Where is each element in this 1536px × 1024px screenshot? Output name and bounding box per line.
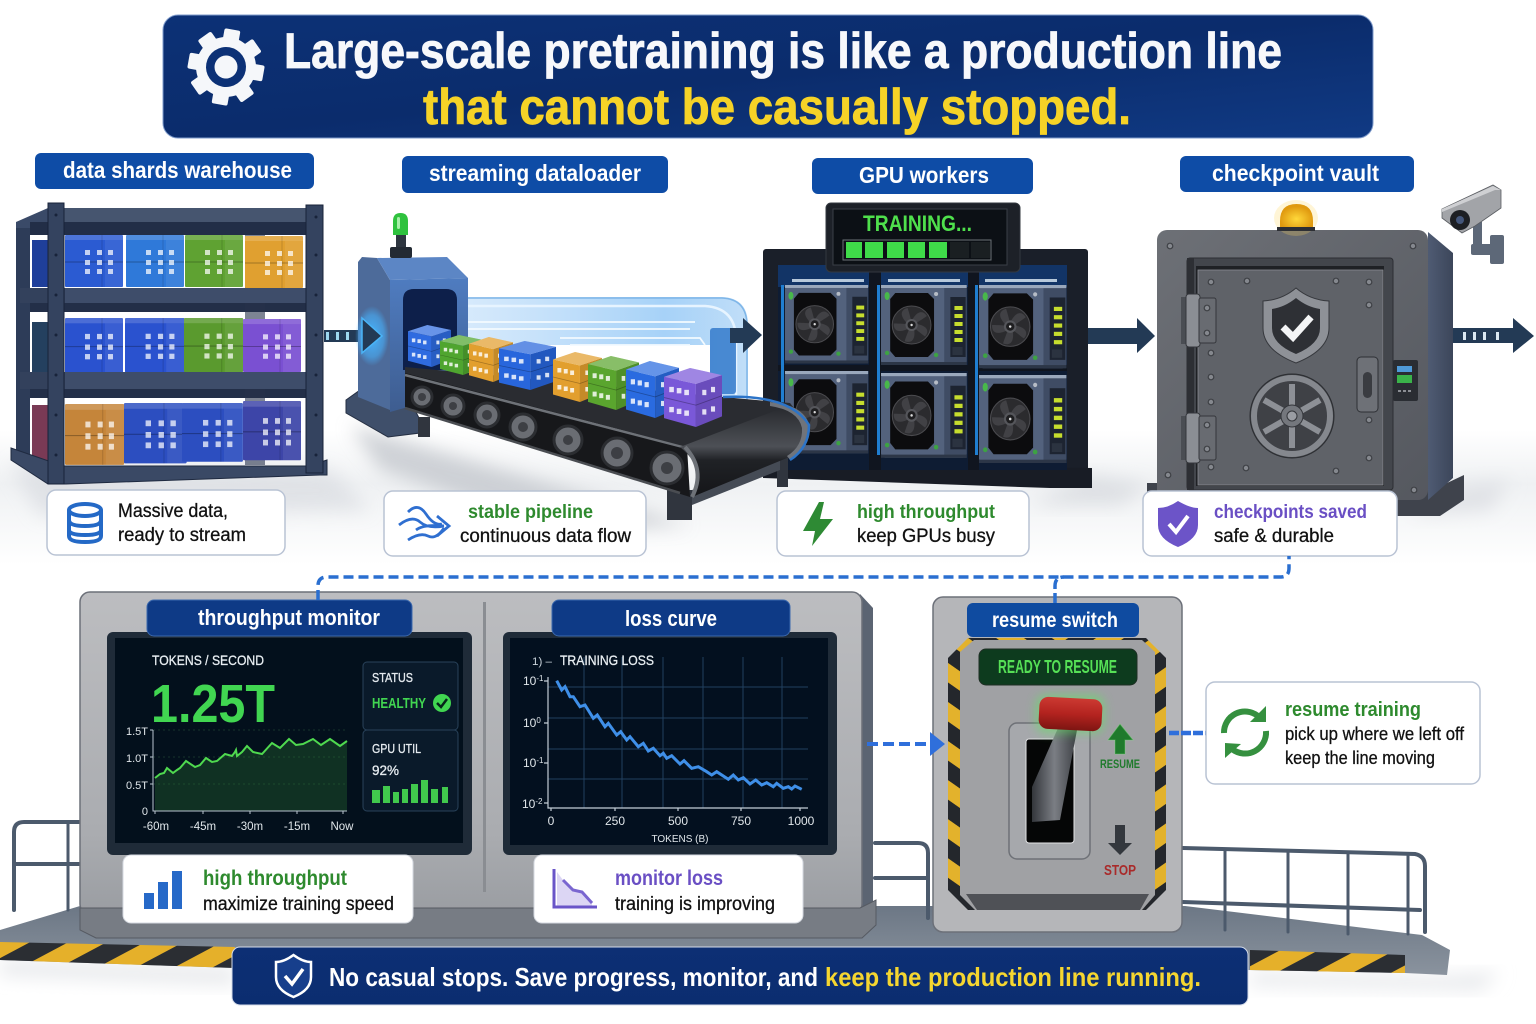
heading: data shards warehouse: data shards warehouse <box>63 157 292 183</box>
vault body <box>1157 230 1428 500</box>
lever glow <box>1036 695 1104 733</box>
chart: training loss: TOKENS (B) <box>651 834 709 845</box>
status panel: STATUS <box>372 670 413 685</box>
chart: throughput line: -45m <box>190 821 216 833</box>
training display <box>826 203 1020 272</box>
caption: keep GPUs busy <box>777 491 1029 556</box>
caption: high throughput: maximize training speed <box>203 894 394 915</box>
caption: high throughput: high throughput <box>203 867 347 890</box>
heading: streaming dataloader <box>402 156 668 193</box>
chart: throughput line: -60m <box>143 821 169 833</box>
caption: massive data: Massive data, <box>118 501 228 522</box>
chart: throughput line: -15m <box>284 821 310 833</box>
icon: vault shield with check <box>1263 288 1329 363</box>
chart: training loss: 10 <box>523 716 536 730</box>
chart: training loss: 500 <box>668 814 688 828</box>
icon: refresh arrows <box>1224 706 1266 758</box>
chart: training loss: 10 <box>523 756 536 770</box>
chart: training loss: 10 <box>523 674 536 688</box>
caption: checkpoints saved <box>1143 491 1397 556</box>
green status lamp <box>390 213 412 258</box>
caption: stable pipeline: continuous data flow <box>460 526 631 547</box>
arrow head into dataloader <box>362 318 382 353</box>
caption: monitor loss: monitor loss <box>615 867 723 890</box>
icon: purple shield <box>1158 501 1198 547</box>
dashed link to resume caption <box>1169 731 1206 735</box>
label: resume: RESUME <box>1100 759 1140 771</box>
vault handle <box>1357 357 1378 412</box>
lever red handle <box>1038 696 1103 732</box>
arrow: GPU rack to vault <box>1088 318 1155 353</box>
chart: throughput line: 1.5T <box>126 726 148 738</box>
panel: loss curve <box>503 600 837 923</box>
warehouse shelf with data shard boxes <box>11 203 327 484</box>
shelf uprights <box>48 203 323 484</box>
GPU units <box>785 285 1066 463</box>
chart: training loss: 1000 <box>788 814 815 828</box>
heading: resume switch: resume switch <box>992 609 1118 632</box>
heading: throughput monitor: throughput monitor <box>198 605 380 630</box>
arrow: vault output <box>1453 318 1534 353</box>
machine body <box>358 257 468 412</box>
icon: lightning bolt <box>803 502 833 546</box>
screen bezel <box>107 632 472 855</box>
caption: high throughput <box>123 855 413 923</box>
chart: throughput line: 0 <box>142 806 148 818</box>
checkpoint vault <box>1147 200 1464 516</box>
arrow: dataloader to GPU rack <box>730 318 762 353</box>
label: stop: STOP <box>1104 862 1136 879</box>
GPU utilisation panel <box>363 730 458 811</box>
metric: 1.25T: 1.25T <box>151 674 275 734</box>
switch housing <box>933 597 1182 932</box>
switch panel <box>960 640 1155 910</box>
conveyor belt top and end drum <box>405 367 810 497</box>
shelf row 2 boxes <box>65 318 301 373</box>
shelf planks <box>11 208 327 484</box>
status panel <box>363 662 458 730</box>
chart: training loss: -1 <box>536 674 544 683</box>
chart: training loss <box>522 652 815 845</box>
heading: GPU workers: GPU workers <box>859 162 989 188</box>
heading: checkpoint vault <box>1180 156 1414 192</box>
chart: training loss: 1) – <box>532 656 553 668</box>
screen bezel <box>503 632 837 855</box>
shelf row 1 boxes <box>65 235 303 288</box>
chart: training loss: 10 <box>522 797 535 811</box>
heading: streaming dataloader: streaming dataloader <box>429 160 641 186</box>
panel: resume switch <box>933 597 1182 932</box>
conveyor belt side and rollers <box>405 372 690 497</box>
heading: loss curve: loss curve <box>625 606 717 631</box>
banner text white: No casual stops. Save progress, monitor, and <box>329 962 818 992</box>
status display: READY TO RESUME <box>998 657 1117 677</box>
safety railings <box>14 822 1425 934</box>
caption: keep GPUs busy: high throughput <box>857 502 996 523</box>
heading: throughput monitor <box>147 600 412 636</box>
arrow: shelf to dataloader <box>324 330 362 342</box>
heading: checkpoint vault: checkpoint vault <box>1212 160 1379 186</box>
caption: resume training: resume training <box>1285 699 1421 721</box>
conveyor legs <box>418 417 788 520</box>
icon: gear <box>182 23 270 111</box>
chart: training loss: 0 <box>548 814 555 828</box>
chart: training loss: -2 <box>535 797 543 806</box>
caption: resume training: keep the line moving <box>1285 747 1435 768</box>
banner text yellow: keep the production line running. <box>825 962 1201 992</box>
icon: loss chart <box>554 869 597 907</box>
chart: throughput line: 1.0T <box>126 753 148 765</box>
vault keypad <box>1393 360 1418 401</box>
chart: training loss: 750 <box>731 814 751 828</box>
heading: loss curve <box>552 600 790 636</box>
shelf row 3 boxes <box>65 401 301 465</box>
caption: keep GPUs busy: keep GPUs busy <box>857 526 995 547</box>
heading: GPU workers <box>812 158 1033 194</box>
vault base <box>1147 475 1464 516</box>
vault side <box>1428 232 1453 500</box>
icon: resume arrow <box>1108 724 1133 754</box>
caption: massive data <box>47 490 285 555</box>
chart: throughput line: -30m <box>237 821 263 833</box>
icon: stop arrow <box>1108 825 1132 855</box>
label: tokens per second: TOKENS / SECOND <box>152 652 264 668</box>
arrow: monitor to resume switch <box>867 732 945 756</box>
caption: stable pipeline: stable pipeline <box>468 502 593 523</box>
chart: throughput line: Now <box>330 821 354 833</box>
title line 2: that cannot be casually stopped. <box>423 79 1131 135</box>
caption: stable pipeline <box>384 491 646 556</box>
panel: throughput monitor <box>107 600 472 923</box>
lever slot <box>1009 723 1090 859</box>
hinges <box>1181 294 1216 463</box>
background floor of the upper line <box>0 425 1536 565</box>
hazard frame right <box>1057 638 1166 910</box>
caption: resume training: pick up where we left off <box>1285 723 1465 744</box>
caption: monitor loss: training is improving <box>615 894 775 915</box>
caption: checkpoints saved: safe & durable <box>1214 526 1334 547</box>
left back boxes <box>32 240 48 460</box>
streaming data flow band <box>468 297 748 400</box>
chart: training loss: -1 <box>536 756 544 765</box>
door frame and door <box>1187 258 1393 490</box>
chart: throughput line: 0.5T <box>126 780 148 792</box>
status panel: HEALTHY <box>372 695 426 712</box>
bottom banner <box>232 947 1248 1005</box>
hazard frame left <box>948 638 1057 910</box>
icon: banner shield <box>276 955 311 997</box>
GPU rack <box>763 203 1092 488</box>
chart: training loss: 0 <box>536 716 541 725</box>
GPU utilisation panel: 92% <box>372 762 399 778</box>
training display: TRAINING... <box>863 211 972 236</box>
vault wheel <box>1250 374 1334 458</box>
platform floor <box>0 906 1500 990</box>
icon: bar chart <box>144 871 182 909</box>
icon: data flow <box>399 507 449 540</box>
shelf back frame <box>16 208 306 465</box>
GPU utilisation panel: GPU UTIL <box>372 741 421 756</box>
title banner <box>163 15 1373 138</box>
chart: training loss: 250 <box>605 814 625 828</box>
caption: resume training <box>1206 682 1480 784</box>
icon: database <box>69 504 101 542</box>
caption: monitor loss <box>534 855 803 923</box>
lever arm <box>1032 728 1077 822</box>
chart: throughput line <box>126 726 354 833</box>
status display <box>979 649 1137 685</box>
machine base <box>346 390 420 437</box>
icon: security camera <box>1442 185 1504 264</box>
monitor housing <box>80 592 876 938</box>
title line 1: Large-scale pretraining is like a production line <box>284 23 1282 79</box>
chart: training loss: TRAINING LOSS <box>560 652 654 668</box>
caption: checkpoints saved: checkpoints saved <box>1214 502 1367 523</box>
rivets <box>1165 243 1417 493</box>
heading: data shards warehouse <box>35 153 314 189</box>
conveyor dataloader <box>346 213 810 520</box>
blue intake glow <box>355 306 389 366</box>
amber lamp <box>1274 200 1318 236</box>
heading: resume switch <box>967 603 1139 637</box>
caption: massive data: ready to stream <box>118 525 246 546</box>
data cubes on belt <box>408 325 722 427</box>
dashed connector from vault to monitor and switch <box>318 556 1289 603</box>
rack frame <box>763 249 1092 488</box>
